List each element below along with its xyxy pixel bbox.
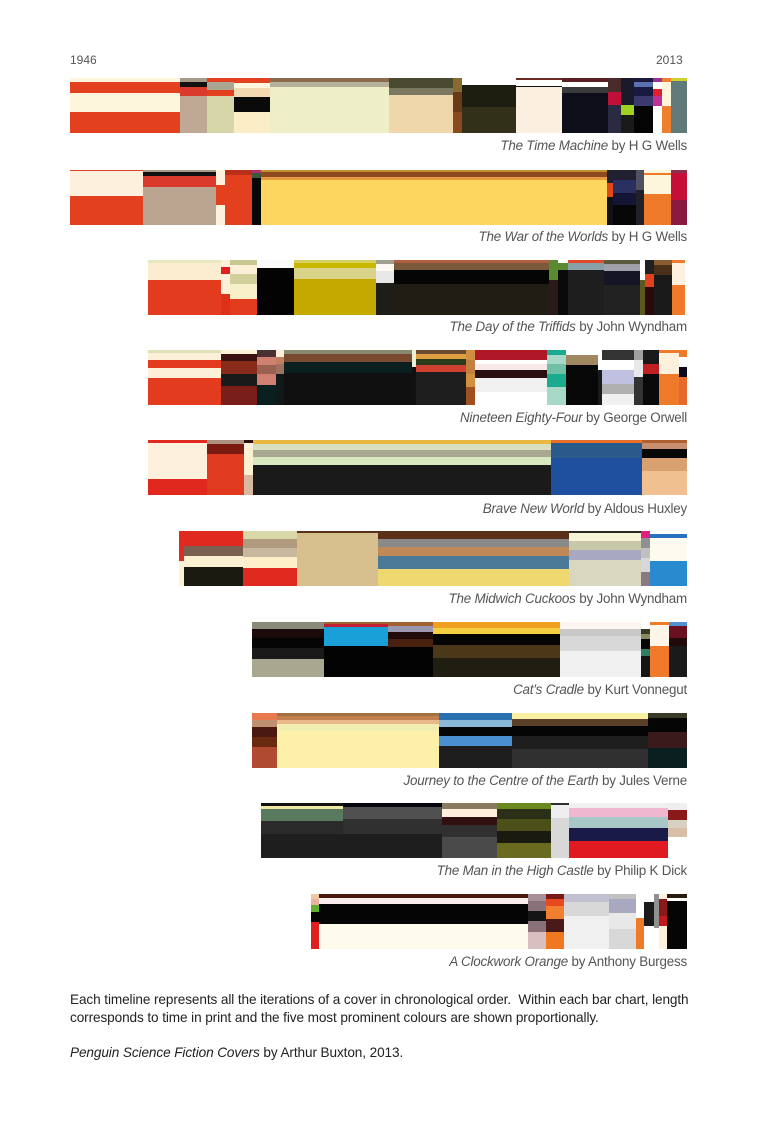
year label end: 2013 bbox=[656, 53, 683, 67]
bar: A Clockwork Orange bbox=[311, 894, 687, 949]
caption: The Midwich Cuckoos: The Midwich Cuckoos by John Wyndham bbox=[448, 591, 687, 606]
caption: Journey to the Centre of the Earth: Journey to the Centre of the Earth by Jules Verne bbox=[404, 773, 687, 788]
bar: Nineteen Eighty-Four bbox=[148, 350, 687, 405]
bar: The Day of the Triffids bbox=[148, 260, 685, 315]
caption: The War of the Worlds: The War of the Worlds by H G Wells bbox=[478, 229, 687, 244]
description text: Each timeline represents all the iterations of a cover in chronological order. Within each bar chart, length bbox=[70, 992, 689, 1007]
caption: The Time Machine: The Time Machine by H G Wells bbox=[500, 138, 687, 153]
credit: Penguin Science Fiction Covers by Arthur Buxton, 2013. bbox=[70, 1045, 403, 1060]
year label start: 1946 bbox=[70, 53, 97, 67]
bar: The Midwich Cuckoos bbox=[179, 531, 687, 586]
caption: A Clockwork Orange: A Clockwork Orange by Anthony Burgess bbox=[449, 954, 687, 969]
bar: The Time Machine bbox=[70, 78, 687, 133]
bar: The Man in the High Castle bbox=[261, 803, 687, 858]
caption: The Man in the High Castle: The Man in the High Castle by Philip K Dick bbox=[437, 863, 687, 878]
description text bbox=[70, 992, 689, 1025]
bar: Cat's Cradle bbox=[252, 622, 687, 677]
bar: Brave New World bbox=[148, 440, 687, 495]
caption: Brave New World: Brave New World by Aldous Huxley bbox=[483, 501, 687, 516]
caption: Cat's Cradle: Cat's Cradle by Kurt Vonnegut bbox=[513, 682, 687, 697]
caption: The Day of the Triffids: The Day of the Triffids by John Wyndham bbox=[450, 319, 687, 334]
description text: corresponds to time in print and the five most prominent colours are shown proportionally. bbox=[70, 1010, 599, 1025]
caption: Nineteen Eighty-Four: Nineteen Eighty-Four by George Orwell bbox=[460, 410, 687, 425]
bar: Journey to the Centre of the Earth bbox=[252, 713, 687, 768]
bar: The War of the Worlds bbox=[70, 170, 687, 225]
